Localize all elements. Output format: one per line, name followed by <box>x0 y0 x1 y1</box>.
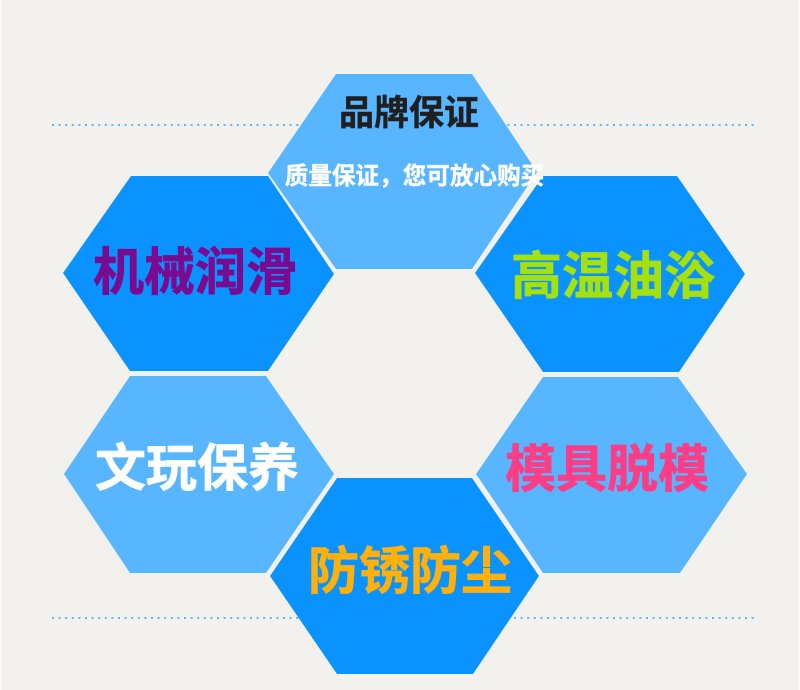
hexagon: machinery lubrication <box>63 176 334 371</box>
label: mold release: 模具脱模 <box>505 441 709 498</box>
hexagon: brand guarantee <box>268 74 537 269</box>
label: machinery lubrication: 机械润滑 <box>93 244 297 301</box>
hexagon: mold release <box>476 377 747 573</box>
heading: brand guarantee: 品牌保证 <box>339 94 479 133</box>
label: collectible care: 文玩保养 <box>95 440 299 497</box>
label: rust and dust prevention: 防锈防尘 <box>308 543 512 600</box>
hexagon: rust and dust prevention <box>270 478 539 674</box>
label: high temperature oil bath: 高温油浴 <box>511 248 715 305</box>
hexagon: high temperature oil bath <box>475 176 745 372</box>
caption: quality guarantee: 质量保证，您可放心购买 <box>285 163 544 190</box>
hexagon: collectible care <box>64 376 334 573</box>
